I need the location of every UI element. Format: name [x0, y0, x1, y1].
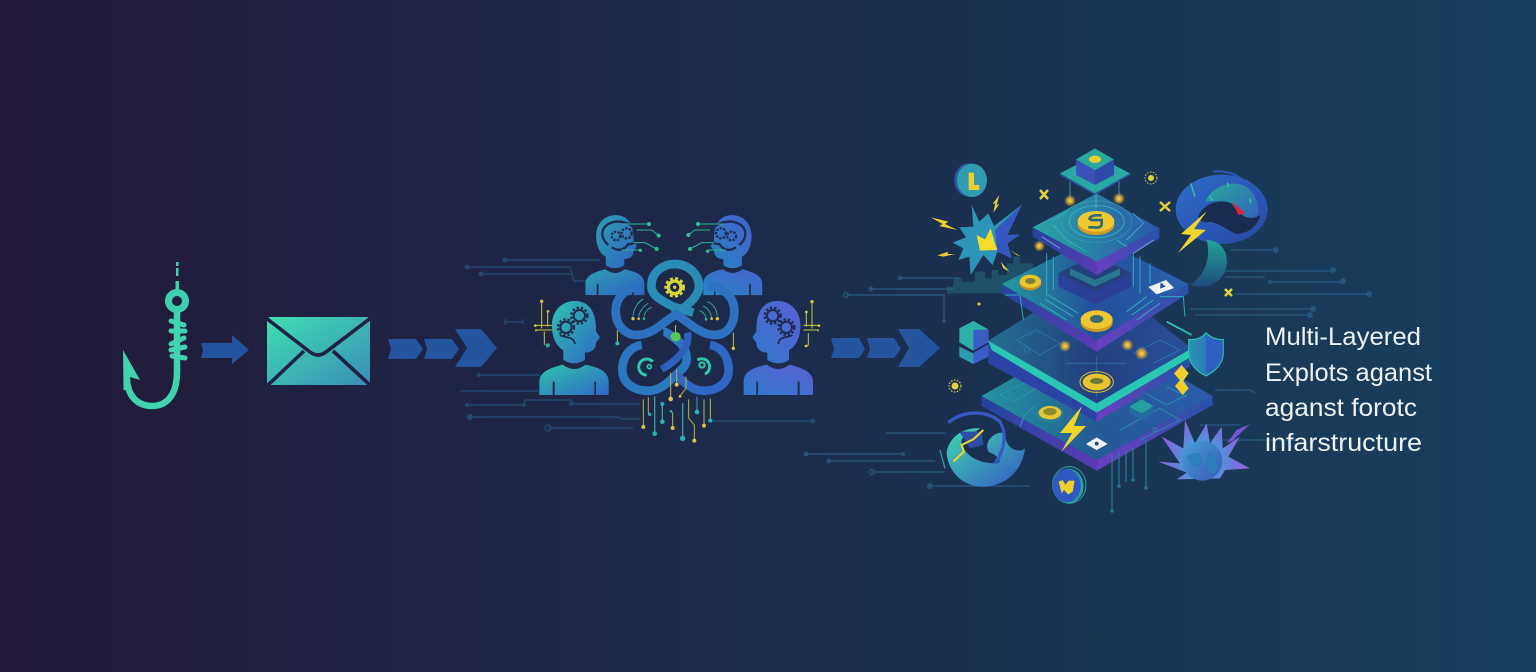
icon: yellow slashes: [1174, 365, 1189, 395]
connector block: [1058, 273, 1132, 304]
coin on base board: [1037, 405, 1063, 423]
text block: caption: Explots aganst: [1265, 359, 1432, 387]
icon: spiked globe: [1158, 420, 1250, 481]
person: bottom left: [534, 300, 609, 395]
tag on base board: [1086, 437, 1108, 450]
icon: left cube: [959, 321, 988, 364]
person: top right: [686, 215, 762, 295]
icon: teal spirals in knot: [639, 359, 710, 375]
layer 4: base board: [982, 330, 1213, 471]
icon: green node in knot: [671, 325, 681, 341]
circuit lines: behind people: [460, 258, 816, 431]
top cube and plate: [1060, 148, 1130, 208]
icon: swirl moon: [940, 406, 1035, 487]
tag: [1148, 280, 1174, 294]
layer 2: middle board: [1002, 237, 1188, 352]
circuit roots below stack: [1110, 440, 1148, 513]
arrow: hook to envelope: [201, 335, 249, 364]
text block: caption: Multi-Layered: [1265, 323, 1421, 351]
text block: caption: [1265, 323, 1432, 457]
small coin: [1019, 275, 1041, 290]
sparkles: [949, 172, 1232, 392]
coin on layer 2: [1081, 310, 1113, 332]
circuit roots below knot: [641, 369, 712, 443]
person: bottom right: [744, 300, 820, 395]
icon: fishing hook: [123, 262, 186, 406]
coin on teal board: [1080, 372, 1113, 392]
glow nodes: [1059, 339, 1148, 360]
text block: caption: aganst forotc: [1265, 394, 1417, 422]
block on base board: [1129, 399, 1153, 420]
knot symbol: [616, 264, 734, 391]
icon: starburst with lightning: [931, 195, 1022, 275]
person: top left: [585, 215, 661, 295]
icon: envelope: [266, 317, 372, 386]
icon: yellow gear in knot: [666, 278, 684, 296]
icon: L coin: [954, 163, 987, 197]
main coin: [1078, 211, 1114, 235]
circuit lines: behind stack: [804, 247, 1372, 489]
arrow: triple chevron after people: [831, 329, 940, 367]
layer 3: teal-edged board: [988, 273, 1192, 422]
layer 1: top board: [1033, 193, 1159, 275]
panel: isometric stack: [947, 148, 1213, 471]
icon: shield: [1167, 322, 1223, 376]
icon: serpent lightning bolt: [1178, 211, 1207, 253]
icon: serpent: [1176, 171, 1268, 287]
icon: lightning bolt on base: [1060, 406, 1086, 452]
icon: W coin: [1053, 467, 1086, 503]
glow lights: [1034, 193, 1125, 252]
circuit details inside knot: [615, 299, 735, 350]
chart: faint bars behind stack: [947, 257, 1033, 293]
panel: people and knot: [534, 215, 820, 443]
arrow: triple chevron after envelope: [388, 329, 497, 367]
text block: caption: infarstructure: [1265, 429, 1422, 457]
